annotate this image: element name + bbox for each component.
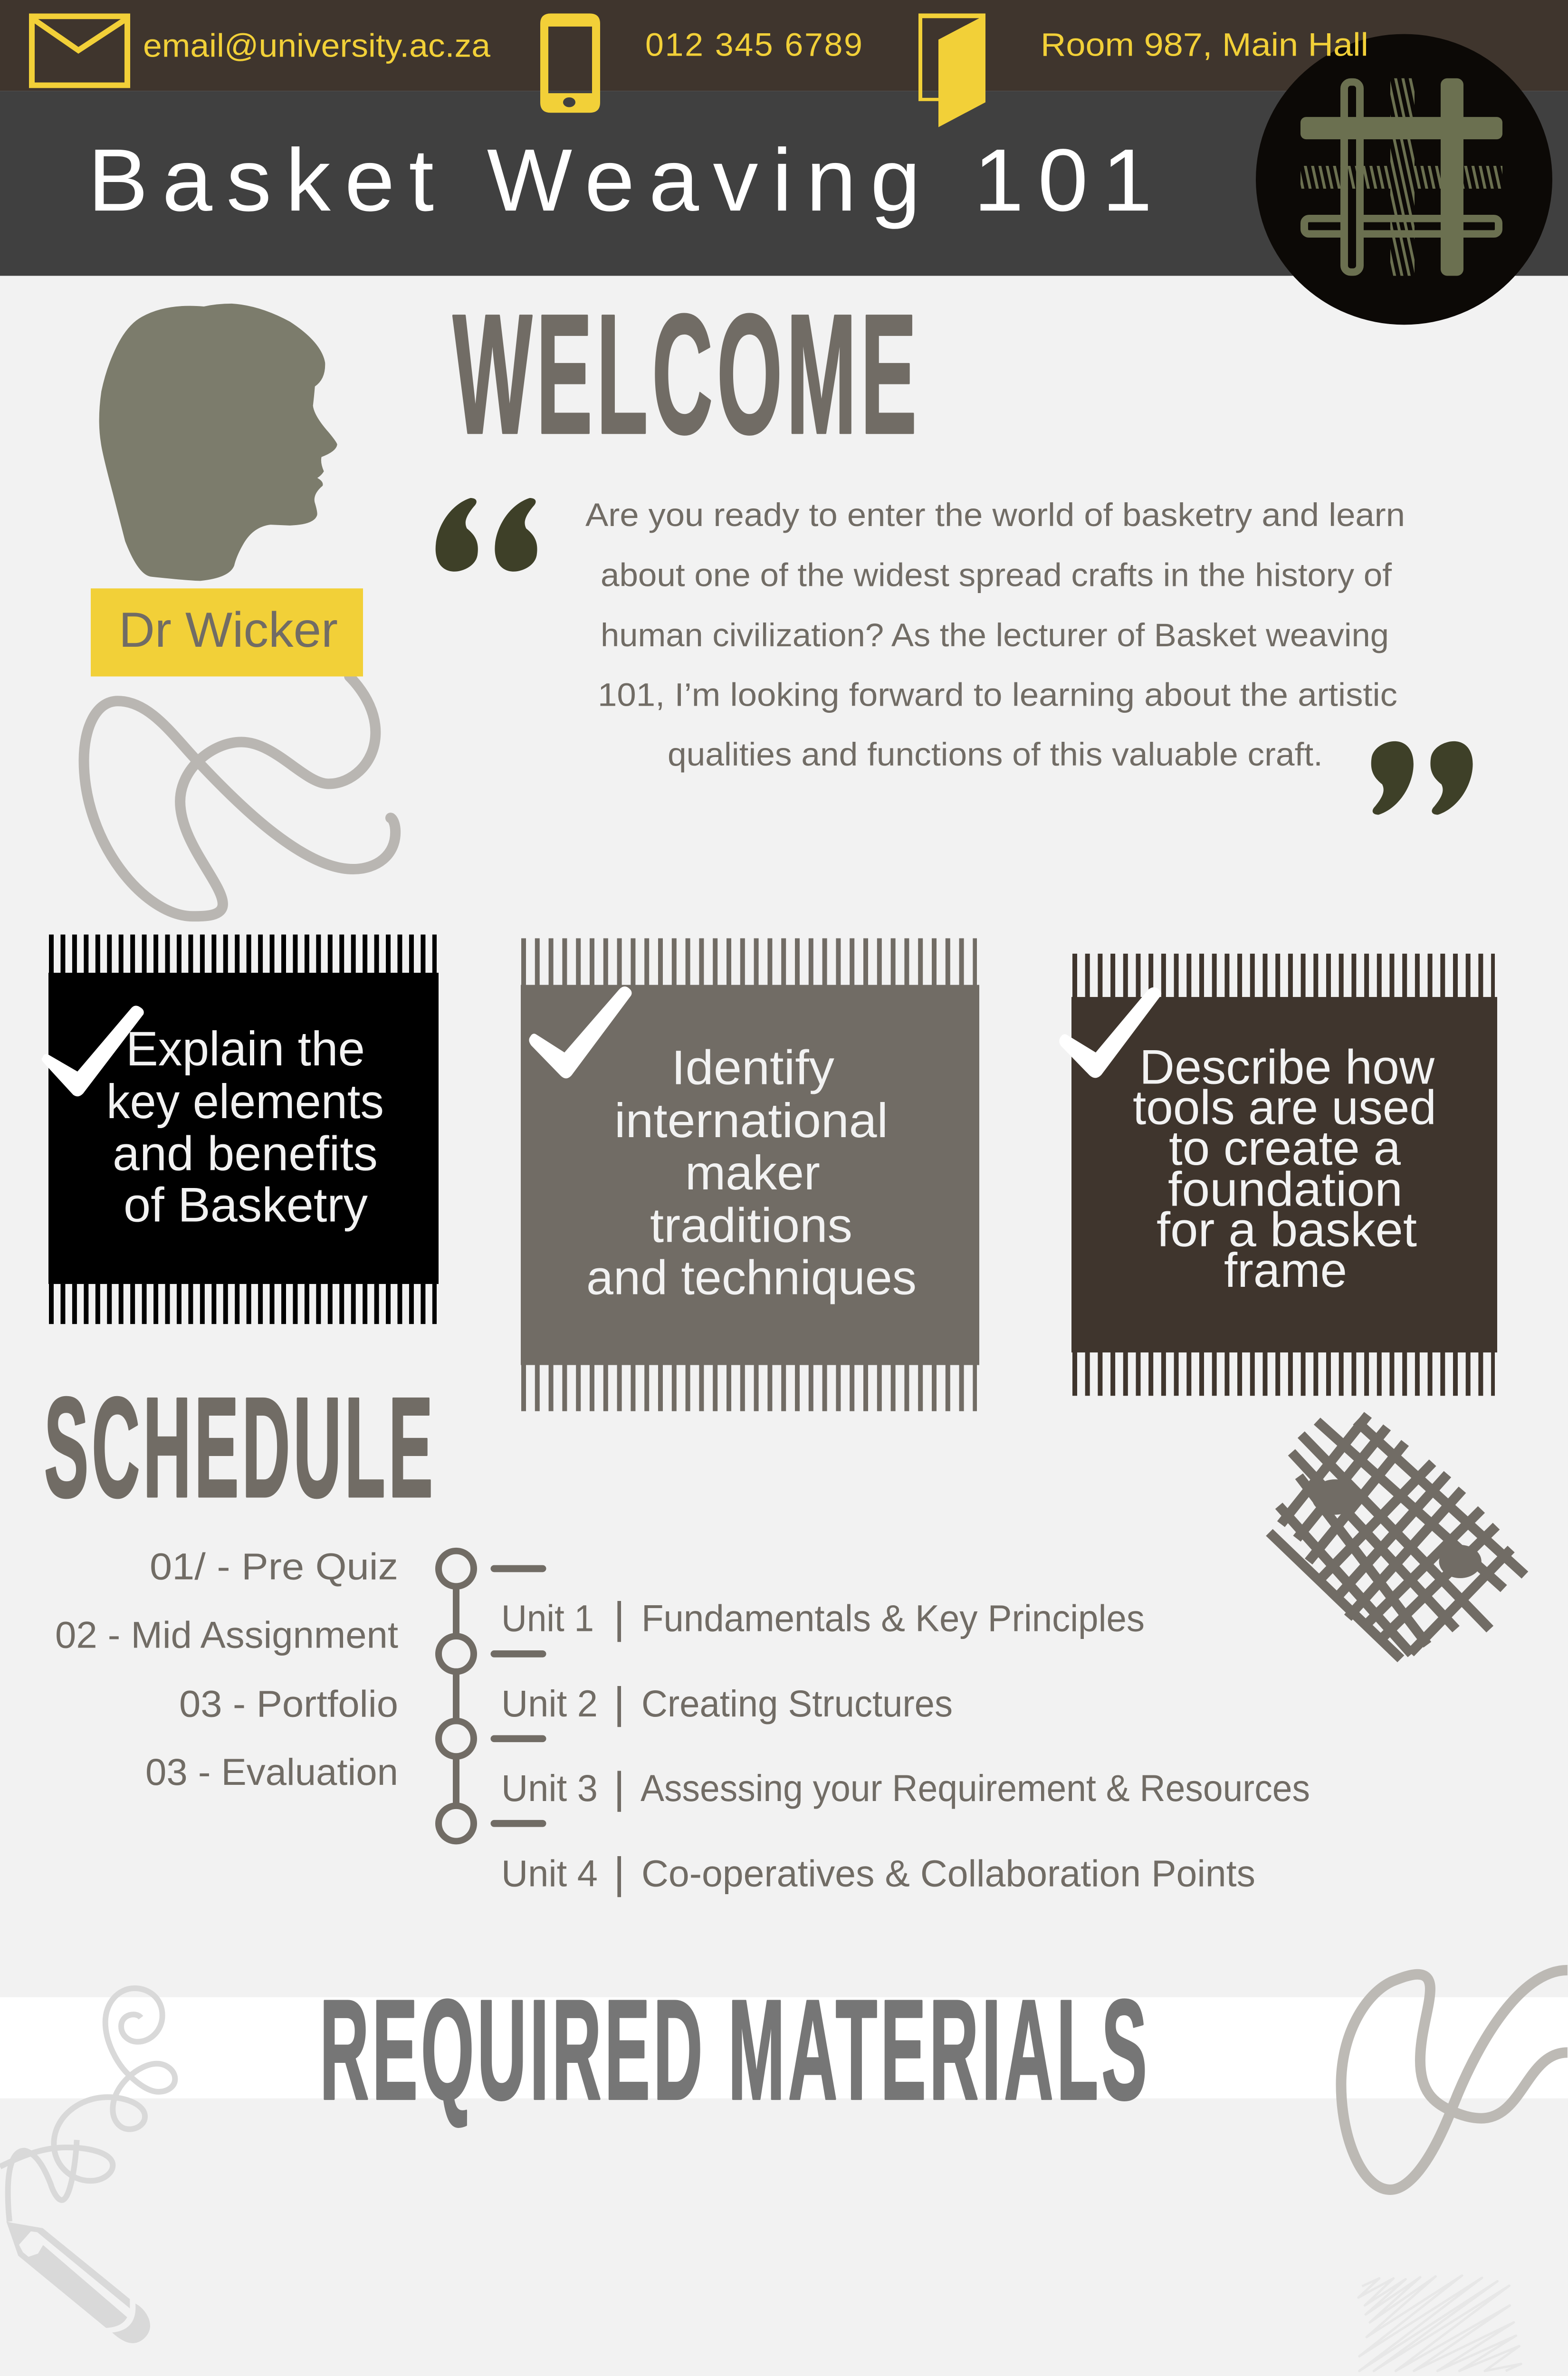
unit 4 row: Unit 4 [501,1852,598,1894]
infographic canvas: SCHEDULE [44,1369,436,1527]
lecturer portrait silhouette [99,304,337,581]
unit 1 row: | [613,1593,625,1642]
unit 2 row: Unit 2 [501,1682,598,1725]
badge: woven hash emblem [1256,34,1552,325]
objective 2 text: international [614,1093,888,1148]
lecturer name tag: Dr Wicker [119,603,338,658]
welcome paragraph: about one of the widest spread crafts in the history of [601,556,1392,593]
unit 2 row [501,1678,953,1727]
icon: check mark 1 [41,1006,144,1096]
unit 4 row [501,1848,1255,1897]
panel: objective 2 rug [521,962,979,1388]
icon: door [918,13,985,127]
objective 3 text: to create a [1169,1121,1401,1175]
icon: check mark 3 [1059,987,1161,1078]
objective 2 text: Identify [671,1040,835,1094]
unit 2 row: | [613,1678,625,1727]
decorative yarn loop right [1341,1970,1568,2190]
welcome paragraph: Are you ready to enter the world of basketry and learn [585,496,1405,533]
panel: objective 1 rug [41,955,439,1304]
title banner [0,91,1568,276]
objective 3 text: Describe how [1139,1040,1435,1094]
objective 1 text: Explain the [126,1022,365,1076]
unit 2 row: Creating Structures [641,1682,953,1725]
phone number: 012 345 6789 [645,26,862,63]
decorative yarn swirl under name [84,676,395,916]
unit 3 row: | [613,1763,625,1812]
assessment list [55,1545,398,1793]
objective 1 text: of Basketry [124,1178,368,1232]
timeline connector [439,1551,543,1841]
objective 3 text: tools are used [1133,1081,1436,1134]
welcome paragraph: qualities and functions of this valuable craft. [668,736,1323,773]
main title: Basket Weaving 101 [88,131,1152,230]
decorative pencil shading scribble [1358,2276,1521,2371]
unit 4 row: Co-operatives & Collaboration Points [641,1852,1255,1894]
objective 3 text [1133,1040,1436,1297]
assessment list: 02 - Mid Assignment [55,1614,398,1656]
icon: opening quote [436,498,537,572]
objective 1 text: key elements [106,1074,384,1129]
icon: check mark 2 [529,987,632,1078]
objective 1 text: and benefits [113,1127,378,1181]
unit 3 row [501,1763,1310,1812]
unit 3 row: Unit 3 [501,1767,598,1809]
office location: Room 987, Main Hall [1041,26,1368,63]
panel: objective 3 rug [1059,976,1497,1373]
objective 2 text: maker [685,1146,820,1200]
email address: email@university.ac.za [143,27,490,64]
decorative pencil and scribble [0,1988,175,2343]
objective 3 text: foundation [1168,1162,1403,1216]
unit 1 row: Fundamentals & Key Principles [641,1597,1145,1639]
unit 4 row: | [613,1848,625,1897]
contact bar [0,0,1568,91]
infographic canvas: WELCOME [453,279,921,469]
icon: woven lattice [1269,1415,1525,1659]
assessment list: 03 - Portfolio [179,1683,398,1725]
section band: required materials [0,1997,1568,2098]
assessment list: 03 - Evaluation [145,1751,398,1793]
icon: envelope [32,16,127,85]
welcome paragraph [585,496,1405,773]
objective 2 text [586,1040,917,1304]
unit 1 row: Unit 1 [501,1597,594,1639]
objective 2 text: and techniques [586,1250,917,1304]
objective 3 text: for a basket [1157,1202,1417,1256]
unit 3 row: Assessing your Requirement & Resources [641,1767,1310,1809]
welcome paragraph: 101, I’m looking forward to learning about the artistic [598,676,1397,713]
icon: closing quote [1371,741,1473,815]
icon: phone [540,13,600,113]
assessment list: 01/ - Pre Quiz [150,1545,398,1587]
welcome paragraph: human civilization? As the lecturer of Basket weaving [601,616,1389,653]
objective 3 text: frame [1224,1243,1347,1297]
lecturer name tag [91,588,363,677]
objective 1 text [106,1022,384,1232]
unit 1 row [501,1593,1145,1642]
objective 2 text: traditions [650,1198,852,1253]
